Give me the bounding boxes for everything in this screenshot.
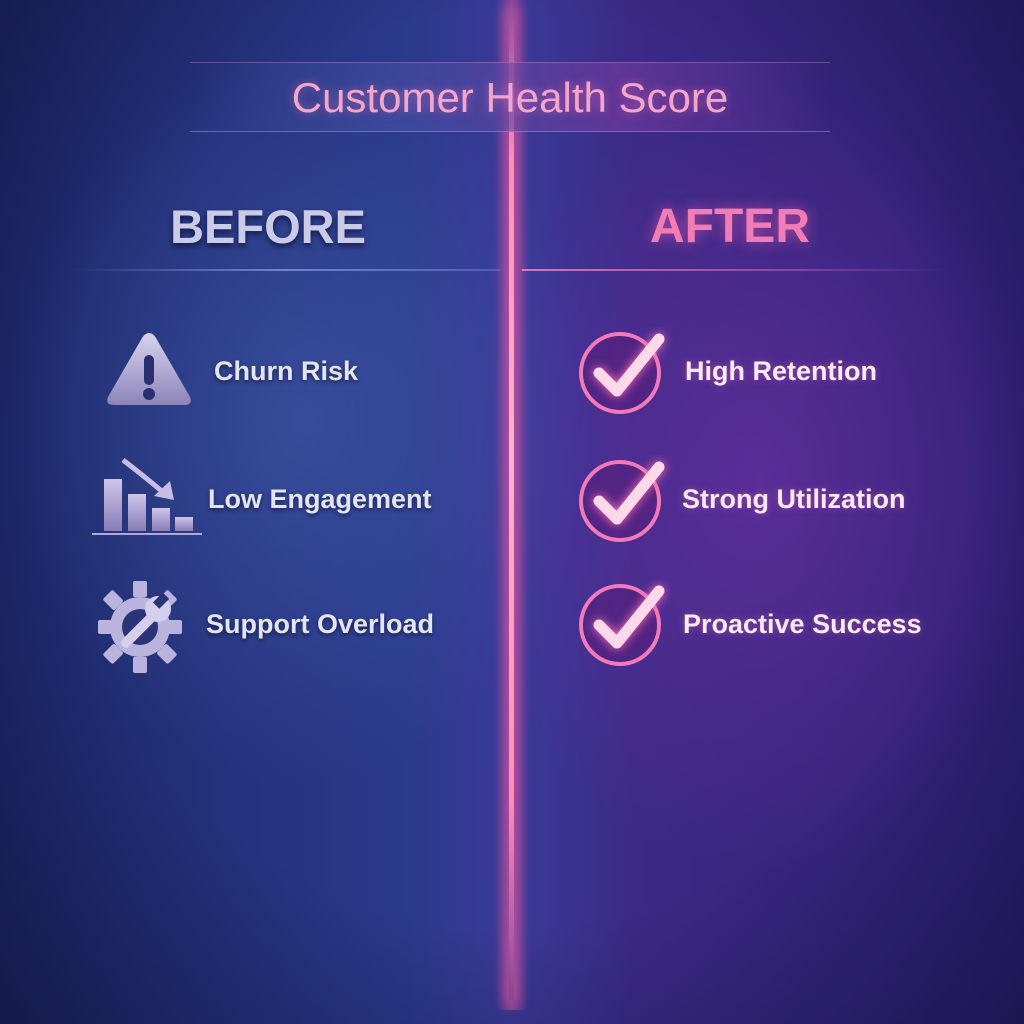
heading: before: BEFORE: [170, 200, 366, 253]
icon: gear wrench: [98, 581, 182, 673]
label: support overload: Support Overload: [206, 609, 434, 639]
title band: [190, 62, 830, 132]
title: Customer Health Score: [292, 74, 728, 121]
label: strong utilization: Strong Utilization: [682, 484, 905, 514]
panel: after: [579, 327, 924, 666]
label: proactive success: Proactive Success: [683, 609, 922, 639]
check: high retention: [579, 327, 671, 414]
label: low engagement: Low Engagement: [208, 484, 432, 514]
icon: warning: [107, 333, 191, 405]
center glow line: [496, 0, 528, 1010]
check: strong utilization: [579, 455, 671, 542]
icon: declining bars: [92, 458, 202, 535]
check: proactive success: [579, 579, 671, 666]
panel: before: [92, 333, 434, 673]
label: high retention: High Retention: [685, 356, 877, 386]
heading: after: AFTER: [650, 200, 810, 253]
label: churn risk: Churn Risk: [214, 356, 358, 386]
